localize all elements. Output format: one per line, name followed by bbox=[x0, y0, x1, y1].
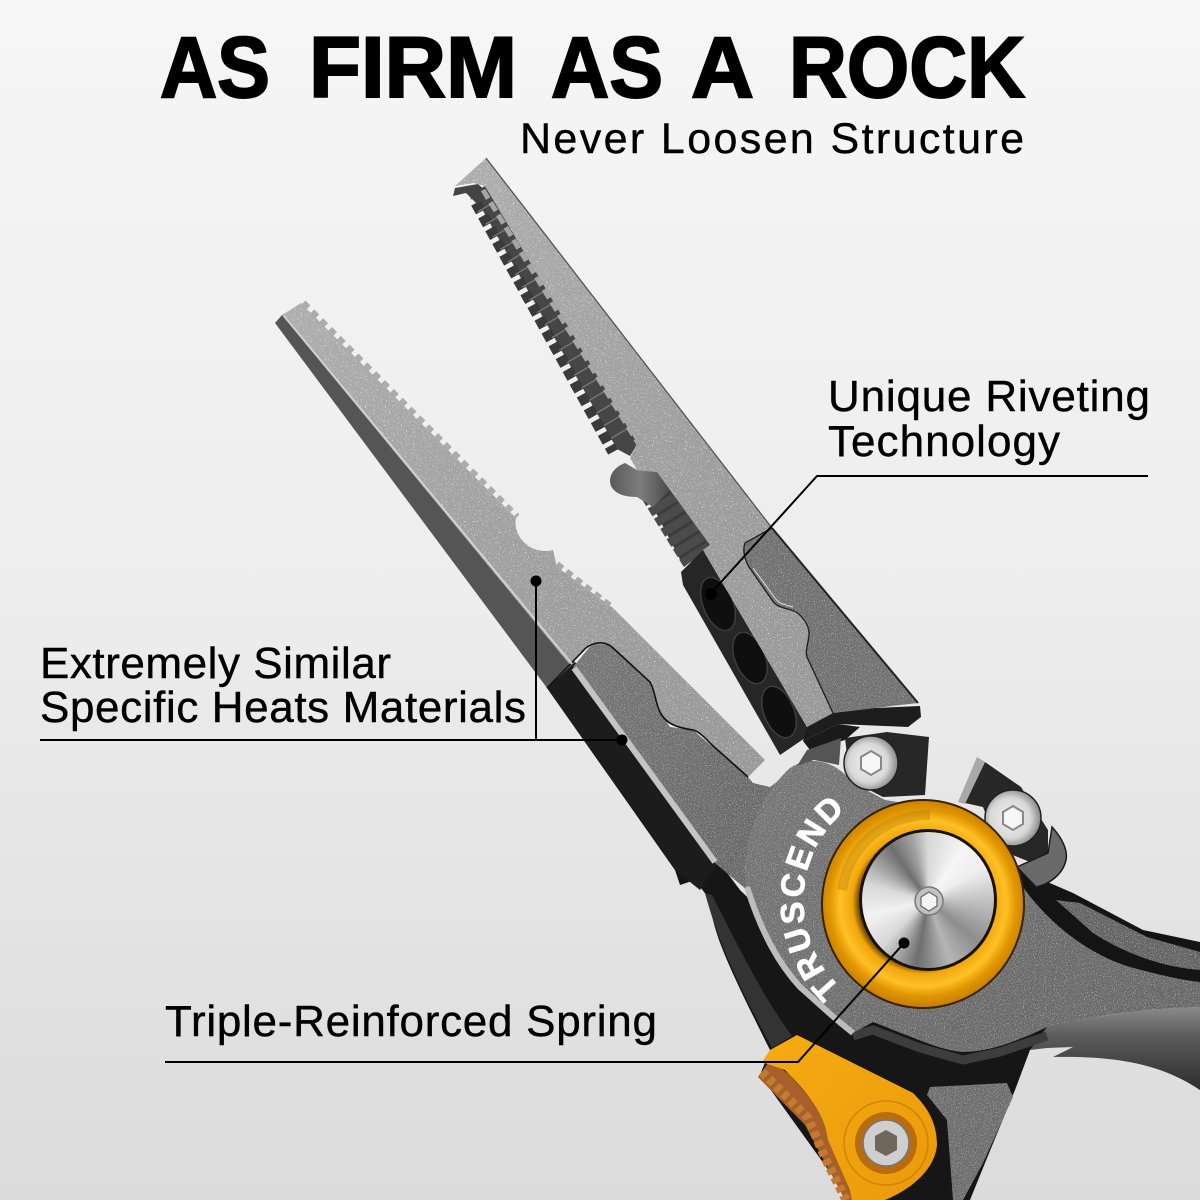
jaw serration bbox=[303, 303, 517, 517]
label text line two: Technology bbox=[828, 417, 1060, 466]
small grey arm bbox=[797, 738, 841, 766]
wedge light stripe bbox=[958, 757, 985, 804]
title: AS bbox=[160, 20, 270, 116]
callout: specific heats materials bbox=[40, 576, 628, 746]
jaw light surface bbox=[282, 303, 765, 777]
lever screw socket bbox=[875, 1130, 897, 1156]
pliers illustration bbox=[275, 158, 1200, 1200]
head and right arm plate bbox=[745, 761, 1200, 1052]
rivet hole three bbox=[755, 681, 803, 743]
jaw black lower side bbox=[547, 662, 720, 890]
brand text TRUSCEND: TRUSCEND bbox=[780, 798, 840, 1004]
dark side with holes bbox=[681, 550, 807, 755]
dark grey side of handle bbox=[705, 893, 792, 1048]
top screw bbox=[844, 736, 898, 790]
leader line bbox=[712, 476, 1148, 592]
title bbox=[160, 20, 1025, 116]
subtitle: Never Loosen Structure bbox=[520, 115, 1024, 163]
lower teeth dark band bbox=[653, 472, 710, 567]
upper handle grey bbox=[1056, 900, 1200, 970]
rivet hole two bbox=[726, 627, 774, 689]
upper jaw light surface bbox=[455, 158, 833, 727]
cap hex socket bbox=[915, 887, 943, 915]
upper jaw serration bbox=[483, 190, 638, 443]
lower right grey plate bbox=[927, 1083, 1013, 1200]
title: FIRM bbox=[309, 20, 517, 116]
label text: Triple-Reinforced Spring bbox=[165, 997, 657, 1046]
dark lip under plate bbox=[853, 1030, 1047, 1060]
upper teeth highlights bbox=[478, 194, 625, 444]
lever teeth bbox=[758, 1060, 858, 1200]
jaw contour line bbox=[547, 643, 748, 777]
black lower body bbox=[547, 667, 1047, 1200]
upper jaw bbox=[453, 158, 921, 755]
jaw textured surface bbox=[573, 643, 795, 890]
jaw top highlight bbox=[284, 316, 572, 664]
label text: Unique Riveting bbox=[828, 372, 1150, 421]
rivet hole one bbox=[694, 572, 742, 636]
leader lines bbox=[40, 581, 622, 740]
right screw wedge bbox=[965, 762, 1048, 862]
jaw light strip bbox=[574, 668, 715, 862]
lever screw bbox=[863, 1120, 909, 1166]
plate contour bbox=[744, 528, 833, 713]
leader dot on jaw surface bbox=[530, 576, 542, 586]
lower handle bbox=[1030, 1007, 1200, 1090]
leader dot bbox=[898, 938, 910, 948]
leader dot on jaw side bbox=[616, 734, 628, 746]
right grey tab bbox=[1017, 827, 1066, 887]
lower jaw bbox=[275, 303, 795, 890]
jaw serration two bbox=[557, 564, 613, 608]
gold lever bbox=[758, 1035, 937, 1200]
label text line two: Specific Heats Materials bbox=[40, 683, 526, 732]
callout: triple-reinforced spring bbox=[165, 938, 910, 1062]
plate contour highlight bbox=[753, 568, 793, 607]
upper teeth dark band bbox=[473, 186, 640, 456]
knob bbox=[610, 463, 670, 507]
head light rim bbox=[747, 887, 853, 1033]
lever body bbox=[762, 1035, 937, 1200]
black joint behind arm bbox=[803, 724, 860, 750]
upper handle black backing bbox=[1015, 868, 1200, 984]
title: AS bbox=[551, 20, 663, 116]
lower teeth ridges bbox=[655, 490, 697, 558]
callout: unique riveting technology bbox=[705, 372, 1150, 600]
upper jaw hook bbox=[453, 184, 487, 205]
lever teeth ridges bbox=[762, 1072, 846, 1200]
leader line bbox=[165, 943, 904, 1062]
upper jaw grey plate bbox=[744, 528, 918, 713]
leader dot bbox=[705, 588, 717, 600]
plate outer edge bbox=[772, 528, 918, 703]
right screw bbox=[985, 790, 1041, 846]
label text: Extremely Similar bbox=[40, 639, 391, 688]
gold ring bbox=[821, 799, 1025, 1009]
outer edge line bbox=[486, 158, 772, 528]
polished spring cap bbox=[862, 832, 994, 968]
title: A bbox=[691, 20, 754, 116]
lever screw ring bbox=[855, 1112, 917, 1174]
upper teeth ridges bbox=[476, 203, 613, 452]
top screw wedge bbox=[845, 732, 929, 797]
jaw dark side bbox=[275, 315, 575, 688]
lever raised ring bbox=[844, 1101, 928, 1185]
black end band bbox=[803, 706, 921, 741]
title: ROCK bbox=[789, 20, 1025, 116]
